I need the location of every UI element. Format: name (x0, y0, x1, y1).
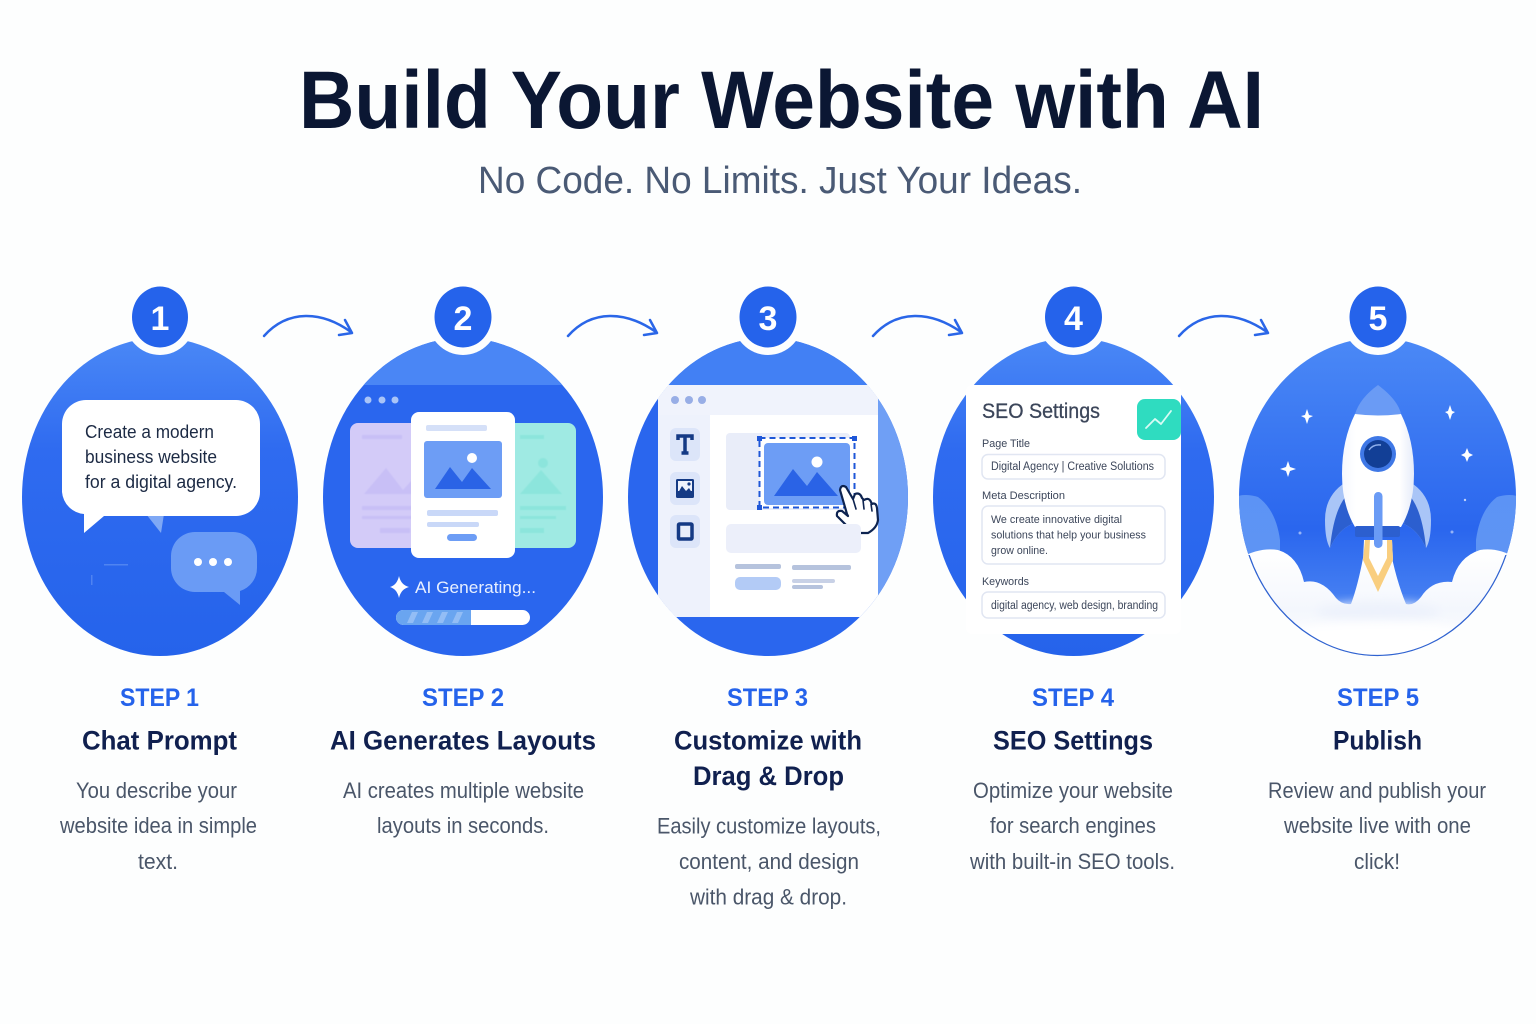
text block: step 3: Drag & Drop (693, 761, 844, 791)
arrow: step 4 to step 5 (1179, 316, 1268, 336)
text block: step 2: AI creates multiple website (343, 778, 584, 803)
title: Build Your Website with AI (299, 55, 1264, 146)
text block: step 2: AI Generates Layouts (330, 726, 596, 756)
icon: typing bubble (171, 532, 257, 605)
text block: step 2 (330, 684, 596, 838)
side haze clouds (1235, 495, 1520, 575)
keywords field: digital agency, web design, branding (991, 600, 1158, 612)
text block: step 5: Review and publish your (1268, 778, 1486, 803)
badge: step 1 number: 1 (151, 300, 169, 338)
badge: step 2 number: 2 (454, 300, 472, 338)
window dots (364, 396, 398, 404)
text block: step 5: click! (1354, 849, 1400, 874)
text block: step 5 (1268, 684, 1486, 874)
text block: step 4: SEO Settings (993, 726, 1153, 756)
keywords field (982, 576, 1165, 618)
layout card: right teal (506, 423, 576, 548)
meta description field: We create innovative digital (991, 514, 1122, 526)
badge: step 3 number: 3 (759, 300, 777, 338)
flame (1363, 540, 1393, 592)
text block: step 4: for search engines (990, 813, 1156, 838)
ellipse outline, lower part (1248, 555, 1506, 656)
layout card: centre white (411, 412, 515, 558)
icon tile: text tool (670, 428, 700, 461)
arrow: step 1 to step 2 (264, 316, 352, 336)
text block: step 2: STEP 2 (422, 684, 504, 712)
chat bubble with prompt: business website (85, 447, 217, 467)
panel: step 1 chat prompt illustration (22, 338, 298, 656)
text block: step 3 (657, 684, 881, 910)
text block: step 4 (969, 684, 1175, 874)
text block: step 5: website live with one (1283, 813, 1471, 838)
text lines and button (735, 564, 851, 590)
icon: faint tail behind chat bubble (146, 514, 164, 533)
editor window (658, 385, 878, 617)
lighter top band (364, 341, 562, 385)
text block: step 1: STEP 1 (120, 684, 199, 712)
keywords field: Keywords (982, 576, 1029, 588)
chat bubble with prompt: Create a modern (85, 422, 214, 442)
panel: step 3 drag and drop editor illustration (628, 338, 908, 656)
layout card: left lavender (350, 423, 420, 548)
content block (726, 524, 861, 553)
badge: step 2 number (427, 279, 499, 355)
body (1342, 414, 1414, 527)
text block: step 5: Publish (1333, 726, 1422, 756)
lighter top area and right edge (668, 341, 908, 596)
text block: step 4: Optimize your website (973, 778, 1173, 803)
panel: step 4 SEO settings illustration (933, 338, 1214, 656)
rocket (1325, 385, 1431, 592)
text block: step 1: text. (138, 849, 178, 874)
fins (1325, 482, 1352, 548)
icon: hand cursor (837, 486, 878, 533)
text block: step 1: You describe your (76, 778, 237, 803)
icon tile: shape tool (670, 515, 700, 548)
text block: step 4: with built-in SEO tools. (969, 849, 1175, 874)
SEO settings card: SEO Settings (982, 399, 1100, 423)
white clouds and exhaust (1240, 549, 1516, 660)
icon: teal trend tile (1137, 399, 1181, 440)
page title field (982, 438, 1165, 479)
arrow: step 2 to step 3 (568, 316, 657, 336)
page title field: Digital Agency | Creative Solutions (991, 461, 1154, 473)
text block: step 3: with drag & drop. (689, 884, 847, 910)
selected image with dashed frame (757, 436, 857, 510)
text block: step 3: content, and design (679, 849, 859, 874)
meta description field (982, 490, 1165, 564)
faint sparkle marks (91, 564, 128, 585)
badge: step 4 number: 4 (1064, 300, 1083, 338)
text block: step 2: layouts in seconds. (377, 813, 549, 838)
text block: step 5: STEP 5 (1337, 684, 1419, 712)
progress bar (396, 610, 530, 625)
text block: step 4: STEP 4 (1032, 684, 1114, 712)
panel: step 2 AI layouts illustration (323, 338, 603, 656)
meta description field: solutions that help your business (991, 530, 1146, 542)
page title field: Page Title (982, 438, 1030, 450)
badge: step 1 number (124, 279, 196, 355)
AI generating label: AI Generating... (415, 578, 536, 597)
badge: step 3 number (732, 279, 804, 355)
badge: step 5 number (1342, 279, 1414, 355)
text block: step 1: website idea in simple (59, 813, 257, 838)
text block: step 3: Easily customize layouts, (657, 814, 881, 838)
chat bubble with prompt: for a digital agency. (85, 472, 237, 492)
base (1355, 526, 1400, 537)
icon: sparkle (390, 576, 409, 598)
nose cone (1355, 385, 1401, 416)
meta description field: grow online. (991, 545, 1048, 557)
text block: step 3: STEP 3 (727, 684, 808, 712)
text block: step 1: Chat Prompt (82, 726, 237, 756)
text block: step 3: Customize with (674, 726, 862, 756)
arrow: step 3 to step 4 (873, 316, 962, 336)
SEO settings card (966, 385, 1181, 634)
badge: step 5 number: 5 (1369, 300, 1387, 338)
text block: step 1 (59, 684, 257, 874)
chat bubble with prompt (62, 400, 260, 533)
subtitle: No Code. No Limits. Just Your Ideas. (478, 160, 1082, 202)
centre fin (1374, 492, 1382, 548)
icon tile: image tool (670, 472, 700, 505)
stars (1280, 405, 1473, 534)
badge: step 4 number (1038, 279, 1110, 355)
window (1360, 436, 1396, 472)
panel: step 5 rocket illustration (1235, 338, 1520, 660)
meta description field: Meta Description (982, 490, 1065, 502)
canvas placeholder (726, 433, 850, 510)
